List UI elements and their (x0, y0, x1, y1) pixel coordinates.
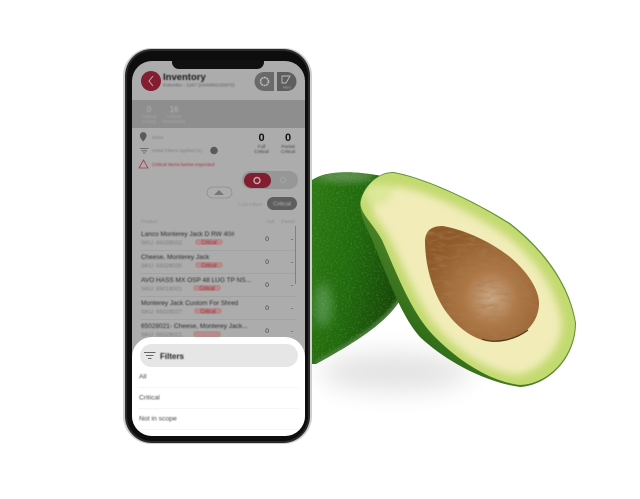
avocado pit (425, 226, 539, 342)
product row 2: Critical (201, 263, 217, 269)
stats band: Critical (167, 114, 181, 119)
product row 5: 65028021- Cheese, Monterey Jack... (141, 323, 248, 330)
stats band: 16 (170, 105, 179, 114)
app header (141, 71, 296, 91)
product row 2: - (291, 259, 293, 266)
avocado photo (312, 170, 580, 392)
settings button (255, 72, 274, 91)
product row 4: - (291, 305, 293, 312)
product row 2: 0 (265, 259, 269, 266)
stats band (132, 100, 305, 128)
view toggle (242, 171, 298, 189)
product row 4: Critical (200, 309, 216, 315)
ground shadow (320, 352, 470, 392)
icon: warning (139, 160, 148, 168)
product row 4: SKU: 65028027 (141, 310, 182, 316)
product row 5: SKU: 65028021 (141, 332, 182, 338)
table header (141, 219, 295, 225)
option: critical: Critical (139, 394, 160, 402)
collapse button (207, 187, 232, 198)
product row 3: 0 (265, 282, 269, 289)
subtitle: Kolumbo - 1267 (04408621l0970) (163, 82, 235, 88)
store info: Store (152, 135, 164, 141)
product row 3: SKU: 89018001 (141, 286, 182, 292)
product row 1: SKU: 65028032 (141, 240, 182, 246)
stats band: Critical (142, 114, 156, 119)
menu button: Menu (283, 86, 291, 90)
avocado cut half (355, 170, 580, 390)
stats band: Found (142, 119, 156, 124)
notch (172, 60, 264, 69)
sheet heading: Filters (160, 352, 185, 361)
product row 3: - (291, 282, 293, 289)
stats band: 0 (147, 105, 152, 114)
sheet heading (140, 344, 298, 367)
option: all: All (139, 374, 147, 380)
critical counters: Critical (281, 149, 295, 154)
product row 2 (140, 254, 296, 274)
filter chips (238, 197, 297, 210)
critical counters: 0 (258, 132, 265, 144)
store info: Critical Items below expected (152, 162, 215, 168)
filters sheet (132, 337, 305, 436)
skin rim (360, 172, 576, 387)
product row 1: Critical (201, 240, 217, 246)
product row 5 (141, 323, 293, 338)
critical counters: Critical (254, 149, 269, 154)
product row 4: 0 (265, 305, 269, 312)
icon: filter lines (140, 148, 148, 153)
product row 1 (140, 231, 296, 251)
option: not in scope: Not in scope (139, 416, 177, 422)
store info: Initial Filters Applied (1) (152, 148, 202, 154)
back button (141, 71, 161, 91)
critical counters: Full (258, 144, 265, 149)
stats band: Remaining (163, 119, 185, 124)
product row 5: 0 (265, 328, 269, 335)
product row 4 (140, 300, 296, 320)
product row 1: Lanco Monterey Jack D RW 40# (141, 231, 235, 238)
product row 3 (140, 277, 296, 297)
product row 2: Cheese, Monterey Jack (141, 254, 210, 261)
table header: Partial (281, 219, 295, 225)
scrollbar (295, 226, 296, 284)
product row 4: Monterey Jack Custom For Shred (141, 300, 239, 307)
filter chips: Critical (273, 202, 291, 208)
critical counters: 0 (285, 132, 291, 144)
product row 5: - (291, 328, 293, 335)
flesh (355, 170, 580, 390)
critical counters: Partial (281, 144, 295, 149)
menu button (277, 72, 296, 91)
icon: location pin (140, 132, 147, 142)
product row 3: AVO HASS MX OSP 48 LUG TP NS... (141, 277, 251, 284)
product row 2: SKU: 65028035 (141, 264, 182, 270)
product row 1: 0 (265, 236, 269, 243)
whole avocado (312, 170, 402, 365)
store info (139, 132, 218, 168)
screen title: Inventory (163, 72, 206, 83)
table header: Product (141, 219, 158, 225)
filter chips: Cold Filters (238, 202, 263, 208)
table header: Full (267, 219, 274, 225)
product row 1: - (291, 236, 293, 243)
phone (123, 48, 312, 444)
critical counters (254, 132, 295, 154)
product row 3: Critical (199, 286, 215, 292)
phone body (123, 48, 312, 444)
